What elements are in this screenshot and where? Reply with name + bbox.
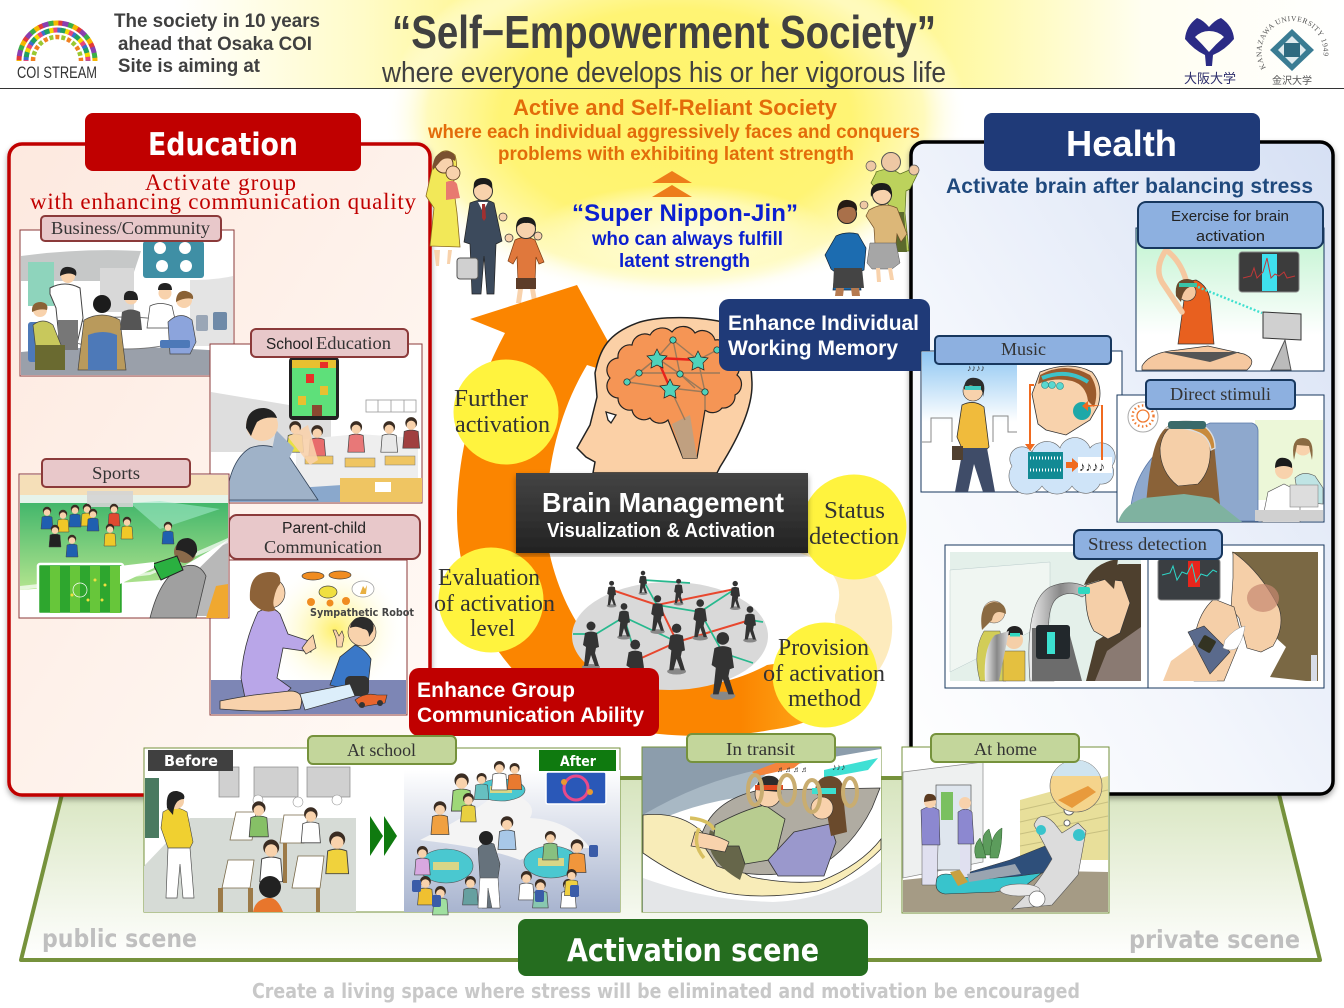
heading: health: Health xyxy=(1066,123,1177,164)
step: status detection xyxy=(802,474,906,580)
label: exercise for brain activation xyxy=(1138,202,1323,248)
header band xyxy=(0,0,1344,88)
super nippon-jin text: latent strength xyxy=(619,250,750,272)
people: mother and child xyxy=(426,151,460,266)
people: elderly man xyxy=(866,152,919,252)
title: where everyone develops his or her vigorous life xyxy=(381,57,946,89)
title: “Self−Empowerment Society” xyxy=(392,6,936,58)
picture: parent-child communication xyxy=(210,560,407,715)
fading return path xyxy=(797,548,892,690)
people: boy xyxy=(505,217,544,303)
education subtitle: Activate group xyxy=(145,170,296,195)
label: parent-child communication: Communication xyxy=(264,537,382,557)
logo: Osaka University xyxy=(1184,18,1236,86)
header intro text xyxy=(114,10,320,77)
society text: Active and Self-Reliant Society xyxy=(513,95,838,120)
heading: education: Education xyxy=(148,127,298,163)
picture: music xyxy=(921,351,1122,494)
panel: education frame xyxy=(9,144,430,795)
callout: enhance individual working memory xyxy=(719,299,930,371)
activation scene base: trapezoid xyxy=(21,778,1320,960)
picture: sports xyxy=(19,474,229,618)
label: at school: At school xyxy=(347,740,416,760)
label: music: Music xyxy=(1001,339,1046,359)
heading: education xyxy=(85,113,361,171)
private scene label: private scene xyxy=(1129,925,1300,954)
people: schoolgirl xyxy=(866,183,907,282)
label: in transit xyxy=(687,734,835,762)
label: parent-child communication: Parent-child xyxy=(282,520,366,537)
step: evaluation of activation level: level xyxy=(470,616,515,642)
label: business community: Business/Community xyxy=(51,218,210,238)
picture: business community xyxy=(20,230,234,376)
picture: school education xyxy=(210,344,422,503)
label: after xyxy=(539,750,616,771)
label: exercise for brain activation: Exercise for brain xyxy=(1171,208,1289,225)
super nippon-jin text: “Super Nippon-Jin” xyxy=(572,200,798,227)
super nippon-jin text: who can always fulfill xyxy=(591,228,783,250)
callout: brain management: Brain Management xyxy=(542,487,784,518)
label: sympathetic robot: Sympathetic Robot xyxy=(310,607,414,619)
people: businessman xyxy=(457,178,507,294)
label: sports xyxy=(42,459,190,487)
picture: at school before and after xyxy=(144,748,620,915)
society glow xyxy=(384,0,968,300)
header intro text: Site is aiming at xyxy=(118,55,260,77)
society text: where each individual aggressively faces and conquers xyxy=(427,121,920,143)
label: direct stimuli: Direct stimuli xyxy=(1170,384,1271,404)
step: status detection: Status xyxy=(824,498,885,524)
step: further activation: activation xyxy=(455,412,550,438)
callout: enhance individual working memory: Working Memory xyxy=(728,337,898,360)
icon: double green arrow xyxy=(370,816,397,856)
picture: music: ♪♪♪♪ xyxy=(1079,459,1105,474)
header intro text: ahead that Osaka COI xyxy=(118,33,312,55)
logo: Kanazawa University: KANAZAWA UNIVERSITY 1949 xyxy=(1256,16,1328,70)
group network illustration xyxy=(572,571,768,700)
step: provision of activation method: method xyxy=(788,686,861,712)
label: at home xyxy=(931,734,1079,762)
label: after: After xyxy=(560,754,596,770)
label: before: Before xyxy=(164,752,218,770)
callout: brain management xyxy=(516,473,808,553)
callout: enhance group communication ability xyxy=(409,668,659,736)
picture: stress detection xyxy=(945,545,1324,688)
orange cycle arrow xyxy=(457,285,835,736)
step: status detection: detection xyxy=(809,524,899,550)
label: parent-child communication xyxy=(229,515,420,559)
label: school education xyxy=(251,329,408,357)
picture: in transit: ♬♬♬♬ xyxy=(777,765,809,774)
picture: in transit xyxy=(642,747,881,912)
icon: double up chevron xyxy=(652,171,692,197)
picture: exercise xyxy=(1136,228,1324,371)
callout: enhance group communication ability: Communication Ability xyxy=(417,704,644,727)
step: evaluation of activation level: of activation xyxy=(434,591,555,617)
activation scene banner xyxy=(518,919,868,976)
step: provision of activation method: Provision xyxy=(778,635,869,661)
label: direct stimuli xyxy=(1146,380,1295,409)
panel: health frame xyxy=(911,142,1333,794)
bottom caption: Create a living space where stress will be eliminated and motivation be encouraged xyxy=(252,979,1080,1003)
title xyxy=(381,6,946,89)
callout: brain management: Visualization & Activation xyxy=(547,520,775,542)
label: business community xyxy=(41,216,221,241)
header intro text: The society in 10 years xyxy=(114,10,320,32)
step: further activation xyxy=(454,360,558,464)
brain with network xyxy=(607,326,741,458)
picture: direct stimuli xyxy=(1117,395,1324,522)
logo: COI STREAM: COI STREAM xyxy=(17,63,97,82)
logo: COI STREAM xyxy=(17,23,97,82)
callout: enhance individual working memory: Enhance Individual xyxy=(728,312,919,335)
step: evaluation of activation level xyxy=(434,548,555,652)
label: at school xyxy=(308,736,456,764)
public scene label: public scene xyxy=(42,924,197,953)
callout: enhance group communication ability: Enhance Group xyxy=(417,679,575,702)
icon: eye xyxy=(606,412,616,423)
label: in transit: In transit xyxy=(726,739,795,759)
activation scene banner: Activation scene xyxy=(567,933,819,969)
health subtitle: Activate brain after balancing stress xyxy=(946,175,1313,198)
step: further activation: Further xyxy=(454,386,528,412)
super nippon-jin text xyxy=(572,200,798,272)
label: sports: Sports xyxy=(92,463,140,483)
education subtitle xyxy=(30,170,416,214)
society text xyxy=(427,95,920,165)
logo: Osaka University: 大阪大学 xyxy=(1184,71,1236,86)
logo: Kanazawa University: 金沢大学 xyxy=(1272,74,1312,87)
step: provision of activation method: of activation xyxy=(763,661,885,687)
label: at home: At home xyxy=(974,739,1037,759)
label: stress detection: Stress detection xyxy=(1088,534,1207,554)
brain silhouette: head xyxy=(577,318,752,473)
picture: in transit: ♪♪♪ xyxy=(832,762,846,772)
label: stress detection xyxy=(1074,530,1222,559)
people: sporty boy xyxy=(825,200,868,296)
label: school education: School xyxy=(266,336,313,353)
picture: music: ♪♪♪♪ xyxy=(967,363,985,373)
label: exercise for brain activation: activation xyxy=(1196,228,1265,245)
label: before xyxy=(148,750,233,771)
society text: problems with exhibiting latent strength xyxy=(498,143,854,165)
step: provision of activation method xyxy=(763,622,885,728)
education subtitle: with enhancing communication quality xyxy=(30,189,416,214)
picture: at home xyxy=(902,747,1109,913)
step: evaluation of activation level: Evaluation xyxy=(438,565,540,591)
label: music xyxy=(935,336,1111,364)
label: school education: Education xyxy=(316,333,391,353)
heading: health xyxy=(984,113,1260,171)
